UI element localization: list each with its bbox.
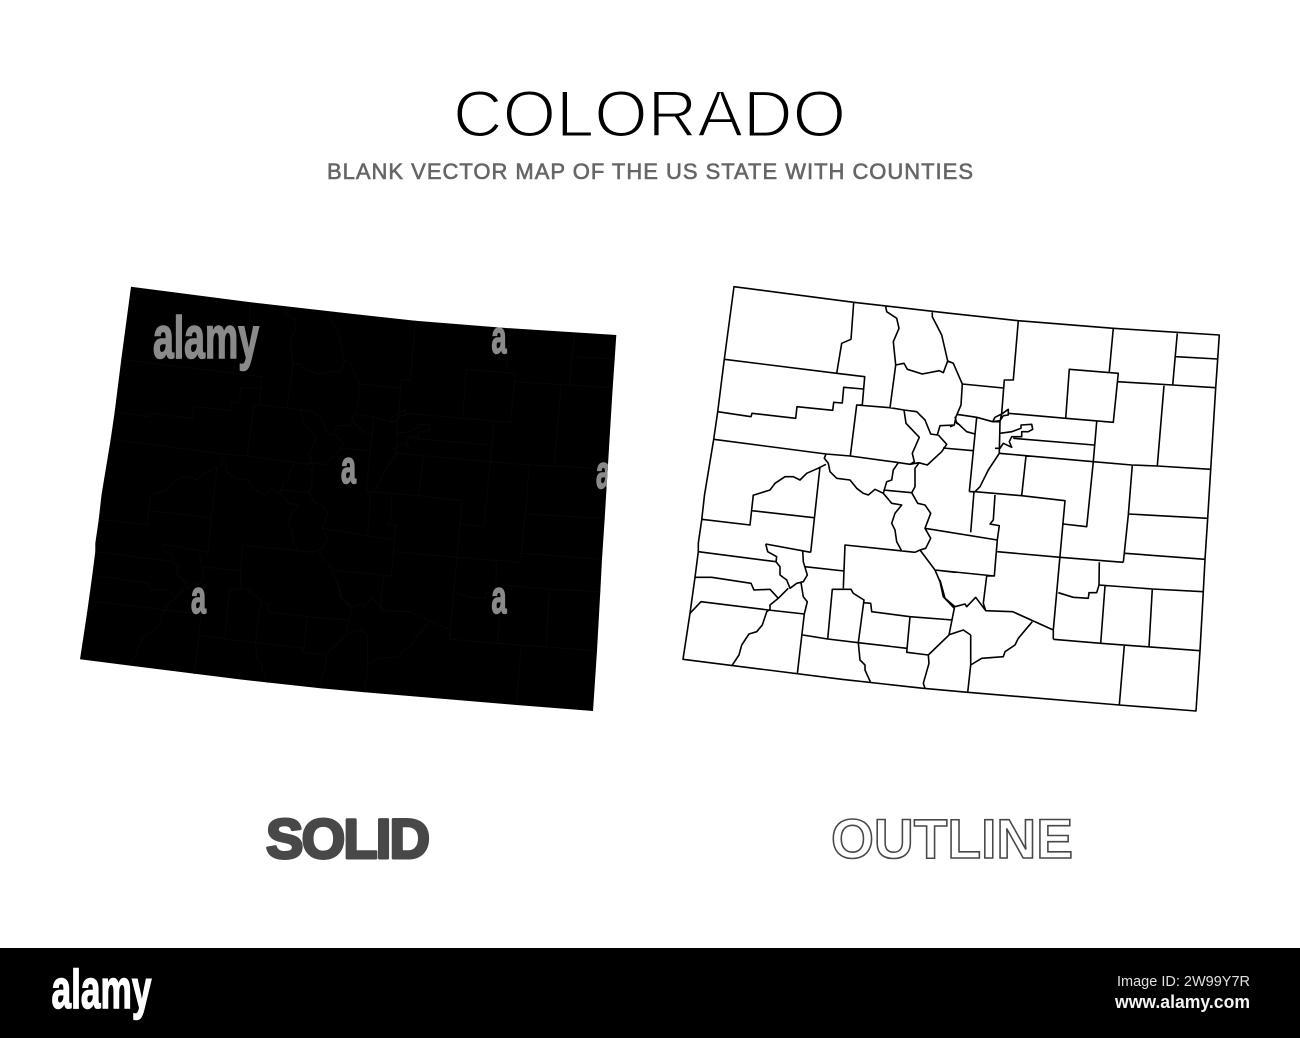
watermarks on solid map: alamy (153, 305, 259, 371)
label: outline: OUTLINE (831, 807, 1073, 870)
website: www.alamy.com (1114, 992, 1250, 1012)
watermarks on solid map (153, 305, 611, 623)
watermarks on solid map: a (492, 571, 507, 623)
watermarks on solid map: a (492, 311, 507, 363)
watermarks on solid map: a (191, 571, 206, 623)
outline map of Colorado with counties (683, 287, 1219, 711)
label: solid: SOLID (266, 807, 430, 870)
image id: Image ID: 2W99Y7R (1117, 973, 1250, 990)
footer bar (0, 948, 1300, 1038)
watermarks on solid map: a (596, 446, 611, 498)
footer logo: alamy (52, 958, 152, 1020)
solid map of Colorado (80, 287, 616, 711)
watermarks on solid map: a (341, 441, 356, 493)
title: COLORADO (453, 76, 846, 150)
subtitle: BLANK VECTOR MAP OF THE US STATE WITH COUNTIES (327, 159, 973, 184)
